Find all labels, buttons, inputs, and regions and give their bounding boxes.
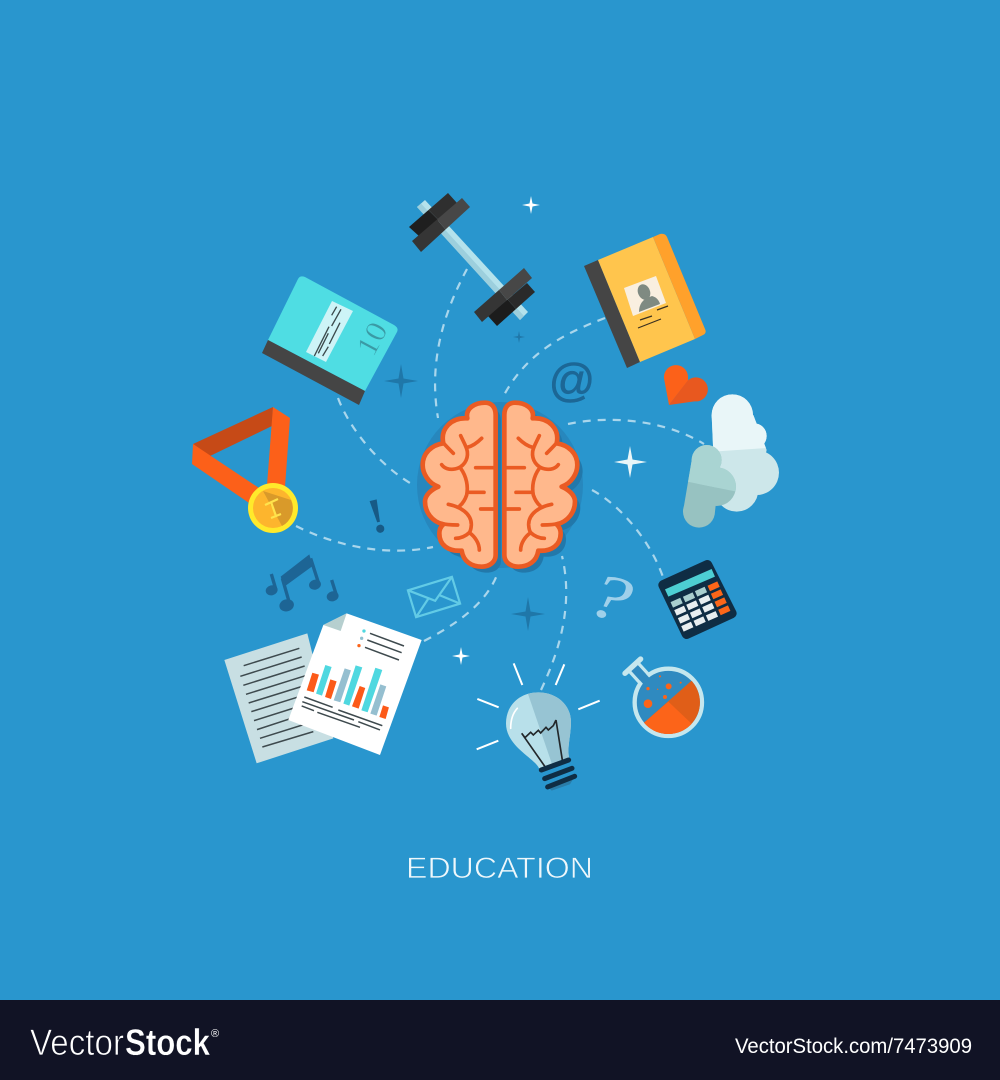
icon: dark star bottom xyxy=(511,597,545,631)
dashed connector lines xyxy=(296,269,704,690)
icon: white star top xyxy=(522,196,540,214)
icon: light bulb xyxy=(477,663,600,791)
icon: barbell xyxy=(409,193,535,326)
footer registered mark: ® xyxy=(211,1028,219,1040)
footer logo stock: Stock xyxy=(125,1022,210,1063)
icon: teal book xyxy=(262,276,398,405)
icon: question mark: ? xyxy=(580,558,639,638)
icon: white star lower xyxy=(452,647,470,665)
icon: brain xyxy=(417,402,583,573)
footer url: VectorStock.com/7473909 xyxy=(735,1035,972,1058)
icon: heart xyxy=(664,365,708,405)
icon: at sign: @ xyxy=(549,354,595,406)
footer logo vector: Vector xyxy=(30,1022,124,1063)
icon: flask xyxy=(625,659,703,750)
icon: yellow address book xyxy=(584,234,706,368)
book number: 10 xyxy=(350,317,395,361)
icon: dark star small xyxy=(513,331,525,343)
icon: white star right xyxy=(614,446,647,478)
icon: dark star left xyxy=(384,364,418,398)
icon: envelope xyxy=(408,577,460,617)
title: EDUCATION xyxy=(406,852,593,885)
icon: calculator xyxy=(663,565,732,634)
icon: documents xyxy=(224,613,422,763)
icon: clouds xyxy=(683,394,779,528)
footer bar xyxy=(0,1000,1000,1080)
icon: exclamation mark: ! xyxy=(362,486,392,545)
icon: medal xyxy=(192,407,298,533)
icon: music notes xyxy=(265,554,340,613)
